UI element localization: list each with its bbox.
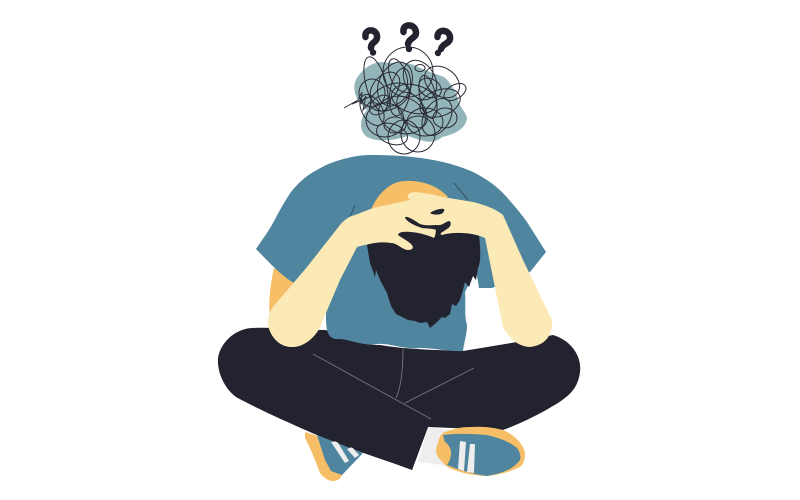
back shoe upper — [317, 435, 363, 475]
finger gaps — [405, 209, 451, 237]
trouser seam lines — [313, 349, 474, 419]
crossed legs trousers — [218, 328, 580, 470]
gap between fingers, lower — [405, 217, 451, 237]
front shoe — [436, 427, 525, 476]
back shoe stripes — [331, 441, 349, 463]
white sock — [418, 427, 452, 466]
t-shirt — [256, 155, 546, 351]
back shoe — [305, 432, 363, 481]
shoe heel — [436, 440, 451, 465]
thought blob — [354, 62, 467, 142]
shirt fold lines — [349, 183, 468, 219]
shoe stripes — [458, 441, 466, 471]
shoe upper — [443, 434, 520, 476]
shoe sole — [438, 427, 525, 476]
hair / beard shape — [367, 225, 480, 328]
orange body behind shirt — [269, 268, 296, 322]
gap between fingers, upper — [430, 209, 444, 215]
left arm and hand — [268, 200, 442, 347]
icon: three question marks — [365, 25, 450, 56]
right arm and hand — [408, 192, 552, 347]
scribble tangle — [344, 47, 469, 154]
orange head — [371, 181, 448, 215]
front trouser leg cuff overlapping shoes — [310, 405, 428, 470]
back shoe sole — [305, 432, 342, 481]
